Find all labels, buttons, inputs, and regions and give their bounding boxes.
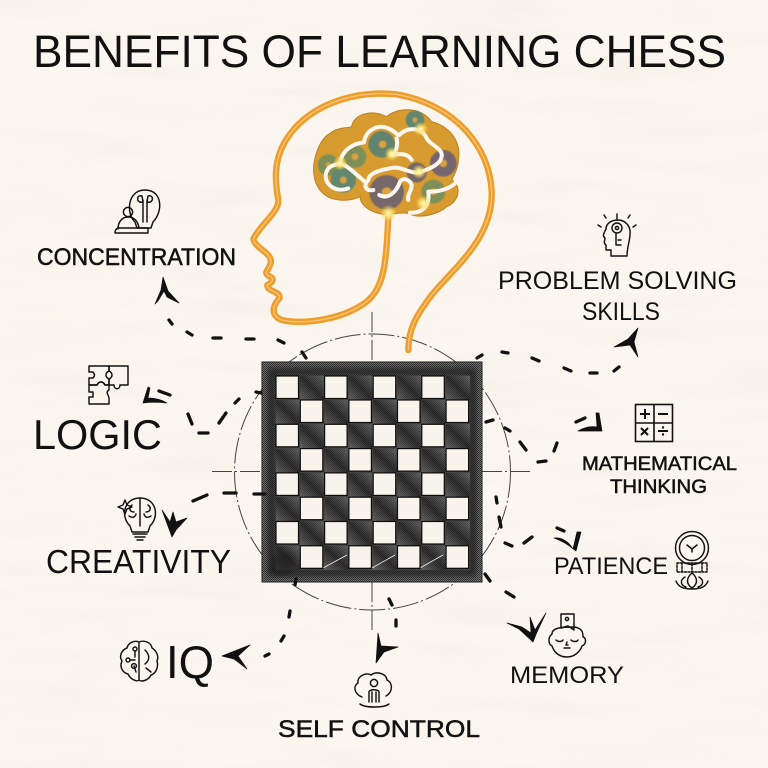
label xyxy=(498,267,737,326)
arrow xyxy=(143,387,261,433)
label: LOGIC xyxy=(33,411,162,458)
label: MATHEMATICAL xyxy=(582,454,737,475)
label: MEMORY xyxy=(510,662,624,689)
arrow xyxy=(222,579,296,669)
label: CONCENTRATION xyxy=(37,244,236,271)
title: BENEFITS OF LEARNING CHESS xyxy=(33,26,726,77)
arrow xyxy=(155,277,306,358)
panel: concentration xyxy=(37,190,306,358)
icon: calculator signs xyxy=(635,404,673,442)
arrow xyxy=(486,413,602,462)
label: SKILLS xyxy=(582,298,660,326)
icon: circuit brain xyxy=(121,641,158,681)
panel: memory xyxy=(485,574,624,689)
arrow xyxy=(485,574,546,642)
label: IQ xyxy=(166,636,214,688)
icon: clock on lotus xyxy=(676,532,708,589)
panel: self control xyxy=(278,599,480,743)
panel: creativity xyxy=(46,493,265,581)
arrow xyxy=(477,328,638,373)
head and brain illustration xyxy=(253,94,492,350)
head outline xyxy=(253,94,492,350)
label xyxy=(582,454,737,498)
label: PROBLEM SOLVING xyxy=(498,267,737,295)
brain xyxy=(314,110,459,222)
icon: puzzle xyxy=(89,366,128,404)
label: SELF CONTROL xyxy=(278,716,480,743)
arrow xyxy=(376,599,398,663)
panel: patience xyxy=(496,497,708,589)
icon: head with key and rays xyxy=(598,214,636,256)
label: THINKING xyxy=(610,477,707,498)
chess board xyxy=(262,362,482,582)
panel: IQ xyxy=(121,579,296,688)
arrow xyxy=(496,497,581,551)
panel: mathematical thinking xyxy=(486,404,737,498)
label: CREATIVITY xyxy=(46,544,231,581)
icon: brain light bulb xyxy=(118,498,155,540)
panel: logic xyxy=(33,366,261,458)
icon: person under tree xyxy=(355,673,391,707)
label: PATIENCE xyxy=(554,553,668,580)
arrow xyxy=(162,493,265,537)
icon: head with bookmark xyxy=(549,614,586,657)
panel: problem solving skills xyxy=(477,214,737,373)
icon: person and light bulb xyxy=(115,190,160,233)
target circle and crosshair xyxy=(212,312,533,633)
